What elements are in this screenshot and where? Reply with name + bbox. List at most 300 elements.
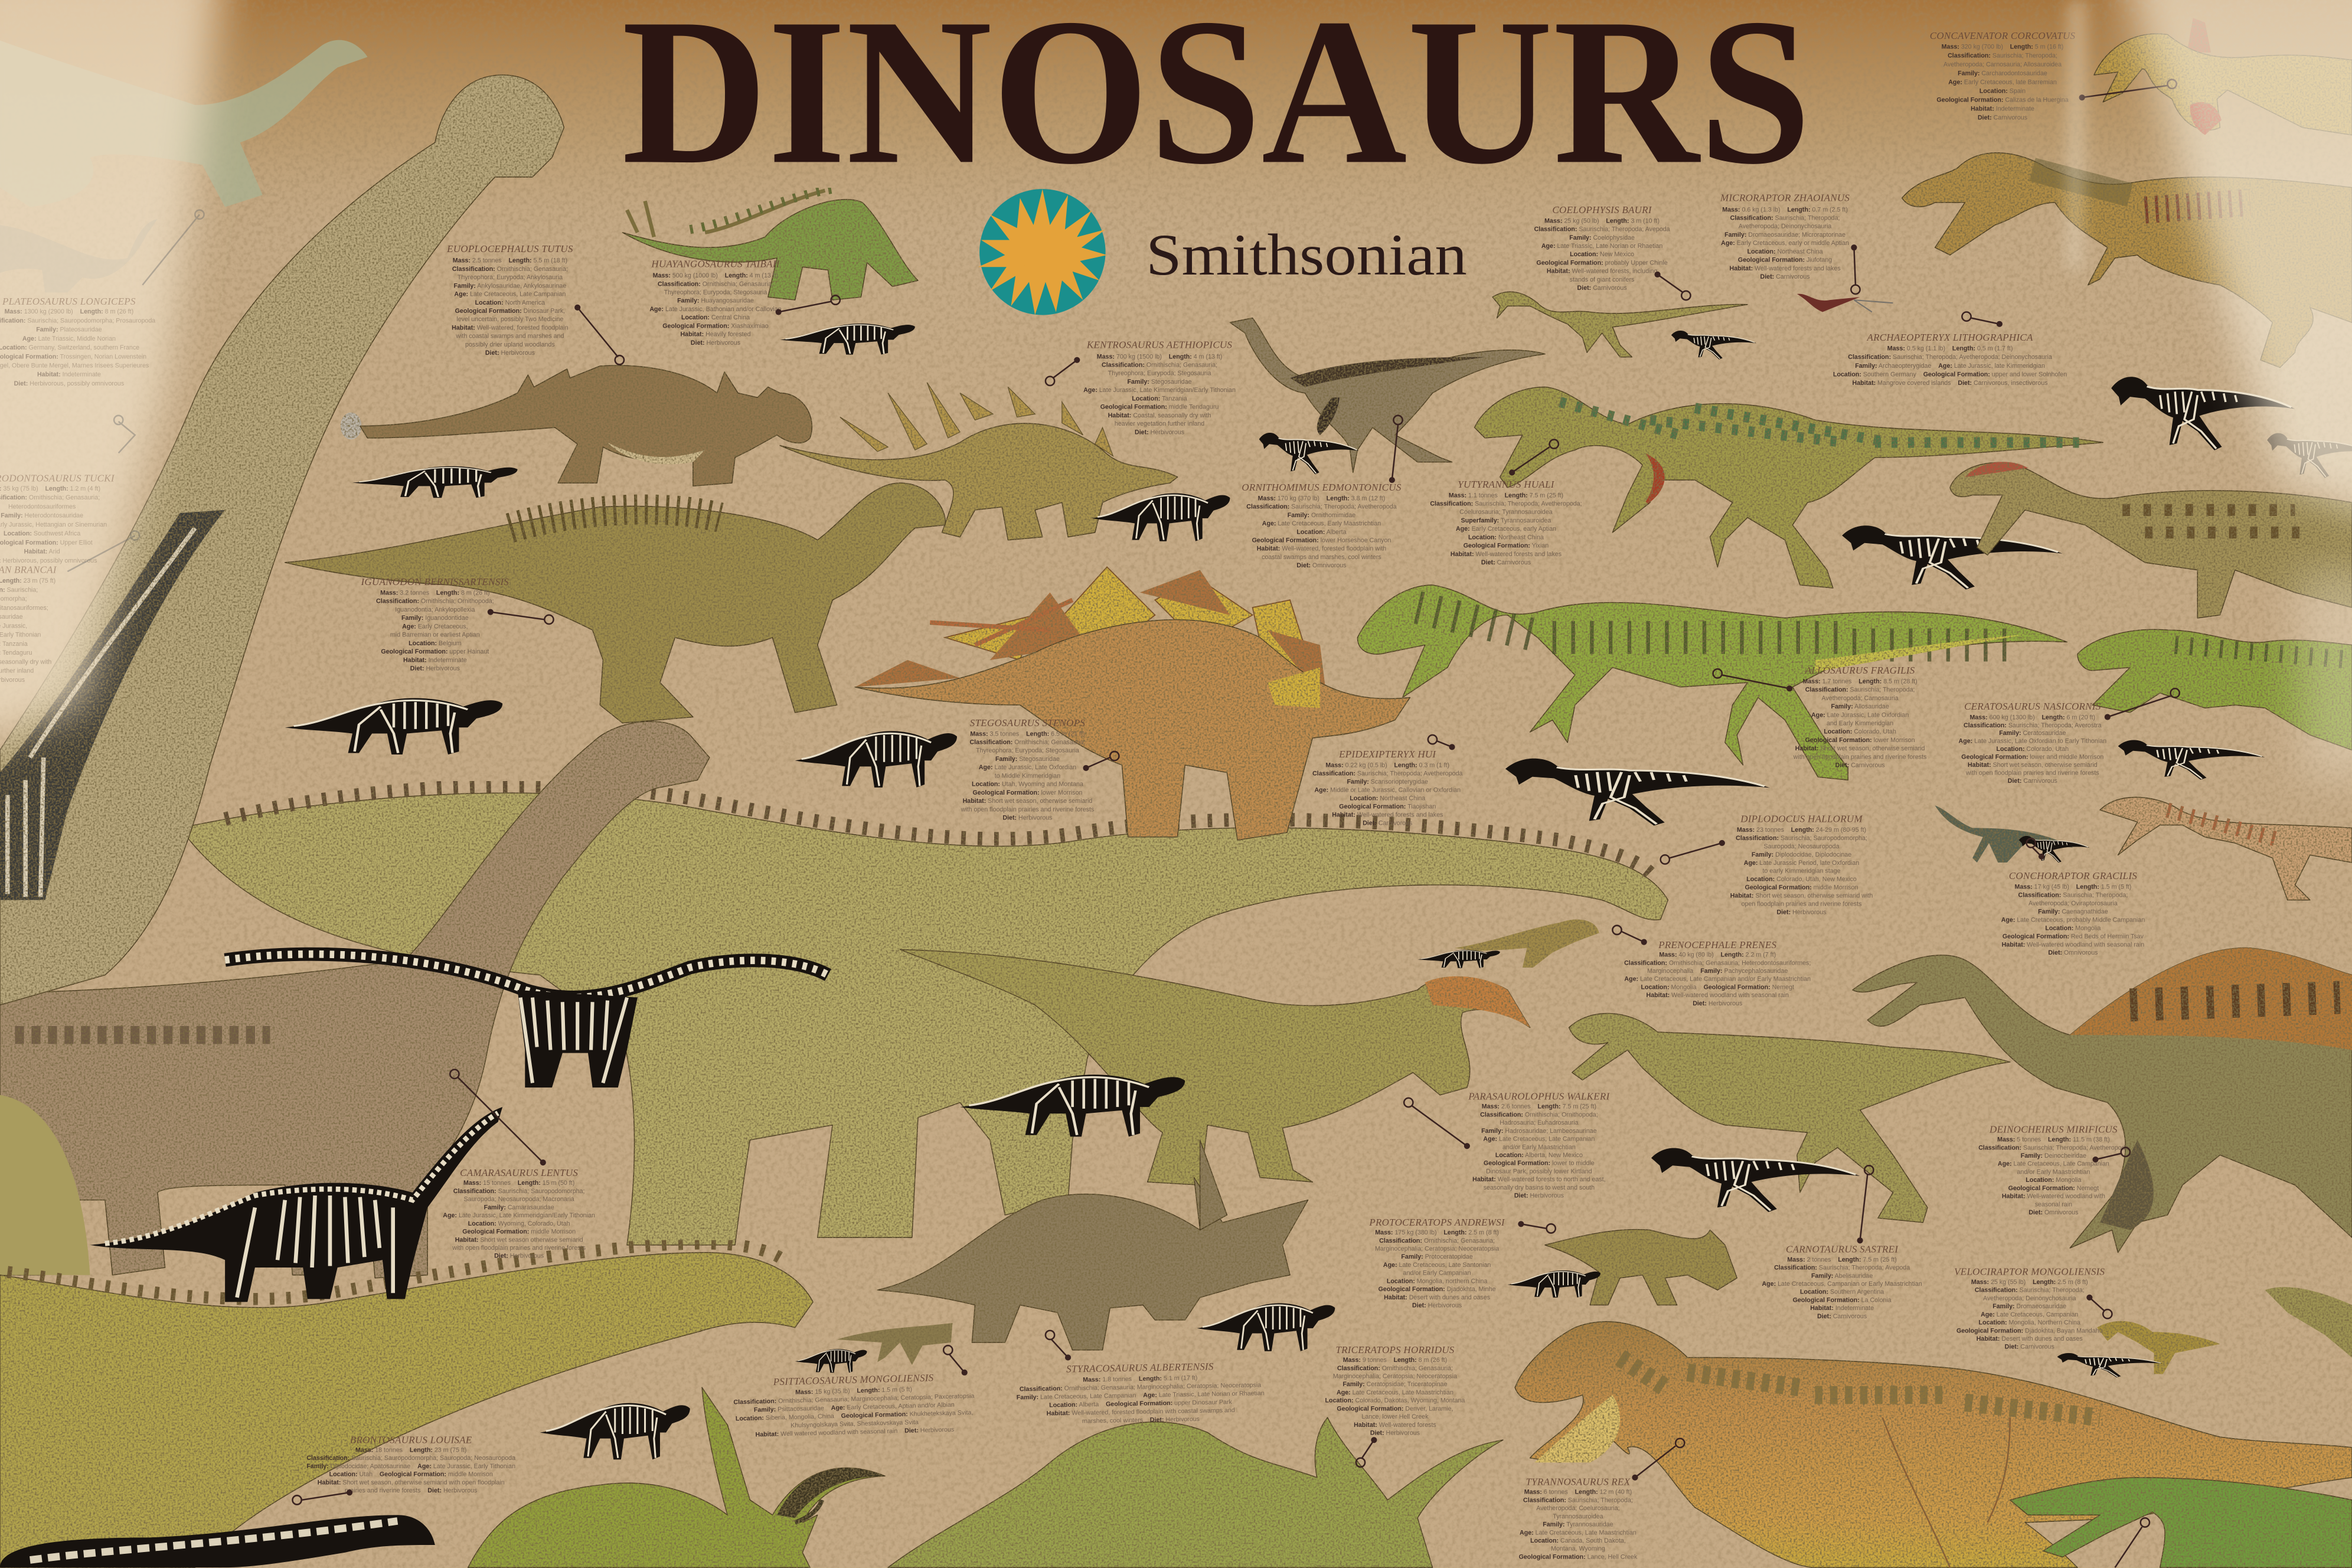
info: kentrosaurus: KENTROSAURUS AETHIOPICUS <box>1086 339 1232 350</box>
info: archaeopteryx: Habitat: Mangrove covered islands Diet: Carnivorous, insectivorous <box>1853 380 2048 387</box>
info: deinocheirus: Family: Deinocheiridae <box>2021 1152 2086 1159</box>
info: iguanodon: Classification: Ornithischia; Ornithopoda; <box>376 598 494 605</box>
info: triceratops: Family: Ceratopsidae; Triceratopinae <box>1342 1381 1448 1388</box>
info: microraptor: Habitat: Well-watered forests and lakes <box>1730 265 1841 272</box>
info: tyrannosaurus: Location: Canada, South Dakota, <box>1530 1537 1626 1544</box>
info: ceratosaurus: CERATOSAURUS NASICORNIS <box>1964 701 2101 712</box>
info: psittacosaurus: Family: Psittacosauridae Age: Early Cretaceous, Aptian and/or Albian <box>754 1402 955 1414</box>
coelophysis <box>1492 292 1747 357</box>
info: allosaurus: and Early Kimmeridgian <box>1827 720 1893 727</box>
faded dinosaur top left <box>0 40 367 207</box>
info: brontosaurus: Classification: Saurischia; Sauropodomorpha; Sauropoda; Neosauropoda <box>306 1455 515 1462</box>
info: iguanodon: Diet: Herbivorous <box>410 665 460 672</box>
info: conchoraptor: Mass: 17 kg (45 lb) Length: 1.5 m (5 ft) <box>2015 883 2131 890</box>
info: triceratops: Lance, lower Hell Creek <box>1361 1413 1429 1420</box>
info: protoceratops <box>1368 1217 1505 1309</box>
info: conchoraptor: Family: Caenagnathidae <box>2038 908 2108 915</box>
info: allosaurus: Classification: Saurischia; Theropoda; <box>1805 687 1915 694</box>
faded info: plateosaurus: Diet: Herbivorous, possibly omnivorous <box>14 380 124 387</box>
info: stegosaurus: Age: Late Jurassic, Late Oxfordian <box>979 764 1076 771</box>
info: iguanodon: Location: Belgium <box>409 640 462 647</box>
info: parasaurolophus: Diet: Herbivorous <box>1514 1193 1564 1200</box>
kentrosaurus <box>780 383 1178 540</box>
info: microraptor <box>1720 192 1850 280</box>
info: tyrannosaurus: Classification: Saurischia; Theropoda; <box>1523 1497 1633 1504</box>
ceratosaurus skeleton <box>2118 740 2265 780</box>
info: huayangosaurus <box>649 258 782 347</box>
tyrannosaur top right <box>1902 153 2352 368</box>
stegosaurus <box>855 567 1410 840</box>
info: conchoraptor: Age: Late Cretaceous, probably Middle Campanian <box>2001 916 2145 923</box>
info: diplodocus: Location: Colorado, Utah, New Mexico <box>1746 876 1857 883</box>
brachiosaurus <box>0 75 564 1005</box>
faded skeleton top left <box>0 219 158 292</box>
coelophysis skeleton <box>1671 331 1756 360</box>
info: tyrannosaurus: Tyrannosauroidea <box>1553 1513 1603 1520</box>
info: parasaurolophus: Location: Alberta, New Mexico <box>1495 1152 1583 1159</box>
info: psittacosaurus: Classification: Ornithischia; Genasauria; Marginocephalia; Ceratopsia; Paxceratopsia <box>733 1393 975 1406</box>
info: euoplocephalus: Mass: 2.5 tonnes Length: 5.5 m (18 ft) <box>453 257 567 264</box>
styracosaurus <box>877 1140 1308 1350</box>
info: concavenator: Classification: Saurischia; Theropoda; <box>1948 53 2057 60</box>
info: allosaurus: Habitat: Short wet season, otherwise semiarid <box>1795 745 1925 752</box>
info: carnotaurus: Diet: Carnivorous <box>1817 1313 1867 1320</box>
info: ornithomimus: ORNITHOMIMUS EDMONTONICUS <box>1242 482 1402 493</box>
info: styracosaurus: Family: Late Cretaceous, Late Campanian Age: Late Triassic, Late Norian or Rhaetian <box>1017 1390 1265 1401</box>
info: velociraptor: Mass: 25 kg (55 lb) Length: 2.5 m (8 ft) <box>1971 1279 2088 1286</box>
info: triceratops: Geological Formation: Denver, Laramie, <box>1337 1405 1453 1412</box>
info: carnotaurus <box>1762 1244 1922 1320</box>
info: ornithomimus: Age: Late Cretaceous, Early Maastrichtian <box>1262 520 1381 527</box>
info: camarasaurus: Family: Camarasauridae <box>484 1204 554 1211</box>
info: euoplocephalus: possibly drier upland woodlands <box>465 341 555 348</box>
info: kentrosaurus: Mass: 700 kg (1500 lb) Length: 4 m (13 ft) <box>1097 353 1222 360</box>
info: coelophysis: stands of giant conifers <box>1570 276 1634 283</box>
triceratops left <box>468 1387 885 1567</box>
info: epidexipteryx: Diet: Carnivorous <box>1363 819 1412 827</box>
info: huayangosaurus: Classification: Ornithischia; Genasauria; <box>658 280 773 288</box>
info: stegosaurus: Diet: Herbivorous <box>1002 815 1053 822</box>
info: styracosaurus: Classification: Ornithischia; Genasauria; Marginocephalia; Ceratopsia; Neoceratopsia <box>1020 1381 1261 1393</box>
info: concavenator: Habitat: Indeterminate <box>1971 106 2034 113</box>
info: tyrannosaurus <box>1519 1476 1638 1560</box>
info: epidexipteryx <box>1312 749 1462 827</box>
info: ornithomimus: Habitat: Well-watered, forested floodplain with <box>1257 545 1386 553</box>
info: yutyrannus: Coelurosauria; Tyrannosauroidea <box>1459 509 1553 516</box>
faded info: heterodontosaurus: Habitat: Arid <box>24 548 60 556</box>
info: concavenator: Age: Early Cretaceous, late Barremian <box>1948 79 2057 86</box>
info: archaeopteryx: Location: Southern Germany Geological Formation: upper and lower Solnhofen <box>1833 371 2067 378</box>
info: microraptor: Location: Northeast China <box>1747 248 1823 255</box>
styracosaurus skeleton <box>1197 1304 1335 1351</box>
info: diplodocus: Age: Late Jurassic Period, late Oxfordian <box>1744 860 1859 867</box>
iguanodon <box>285 483 945 723</box>
info: carnotaurus: Geological Formation: La Colonia <box>1793 1296 1892 1304</box>
info: archaeopteryx: Family: Archaeopterygidae Age: Late Jurassic, late Kimmeridgian <box>1855 362 2045 370</box>
info: concavenator: Diet: Carnivorous <box>1978 115 2027 122</box>
info: velociraptor: Age: Late Cretaceous, Campanian <box>1981 1311 2078 1318</box>
info: deinocheirus: seasonal rain <box>2035 1201 2072 1208</box>
info: archaeopteryx: ARCHAEOPTERYX LITHOGRAPHICA <box>1866 332 2033 343</box>
info: kentrosaurus: Location: Tanzania <box>1132 395 1187 402</box>
info: diplodocus: Geological Formation: middle Morrison <box>1745 884 1858 891</box>
info: concavenator: CONCAVENATOR CORCOVATUS <box>1930 30 2075 41</box>
info: coelophysis: Geological Formation: probably Upper Chinle <box>1537 259 1668 266</box>
info: triceratops: Location: Colorado, Dakotas, Wyoming, Montana <box>1325 1397 1465 1404</box>
info: epidexipteryx: Family: Scansoriopterygidae <box>1347 779 1428 786</box>
info: iguanodon: IGUANODON BERNISSARTENSIS <box>360 576 509 587</box>
info: styracosaurus: Mass: 1.8 tonnes Length: 5.1 m (17 ft) <box>1083 1374 1197 1384</box>
info: yutyrannus: Diet: Carnivorous <box>1481 559 1531 566</box>
info: diplodocus: Classification: Saurischia; Sauropodomorpha; <box>1736 835 1867 842</box>
info: euoplocephalus: Location: North America <box>475 299 545 306</box>
info: carnotaurus: Family: Abelisauridae <box>1811 1272 1873 1279</box>
faded info: giraffatitan <box>0 564 57 684</box>
info: camarasaurus <box>443 1167 595 1260</box>
info: yutyrannus: Geological Formation: Yixian <box>1464 543 1549 550</box>
info: conchoraptor: Classification: Saurischia; Theropoda; <box>2018 891 2128 899</box>
info: carnotaurus: Age: Late Cretaceous, Campanian or Early Maastrichtian <box>1762 1280 1922 1288</box>
info: stegosaurus: Mass: 3.5 tonnes Length: 6.5 m (21 ft) <box>970 730 1085 737</box>
info: tyrannosaurus: Family: Tyrannosauridae <box>1543 1521 1613 1528</box>
info: ceratosaurus: Mass: 600 kg (1300 lb) Length: 6 m (20 ft) <box>1969 714 2095 721</box>
faded callout pins left <box>67 210 204 571</box>
info: camarasaurus: with open floodplain prairies and riverine forests <box>452 1244 586 1252</box>
info: euoplocephalus: Habitat: Well-watered, forested floodplain <box>452 324 569 331</box>
info: huayangosaurus: Thyreophora; Eurypoda; Stegosauria <box>664 289 767 296</box>
protoceratops skeleton <box>1508 1270 1600 1298</box>
info: ceratosaurus: Classification: Saurischia; Theropoda; Averostra <box>1964 722 2102 729</box>
info: psittacosaurus: Mass: 15 kg (35 lb) Length: 1.5 m (5 ft) <box>795 1386 912 1396</box>
camarasaurus skeleton <box>90 1107 502 1302</box>
info: kentrosaurus: Diet: Herbivorous <box>1135 429 1184 436</box>
info: prenocephale <box>1624 939 1811 1007</box>
info: allosaurus: Age: Late Jurassic, Late Oxfordian <box>1811 711 1909 718</box>
info: psittacosaurus: Habitat: Well watered woodland with seasonal rain Diet: Herbivorous <box>755 1426 954 1438</box>
info: brontosaurus: Location: Utah Geological Formation: middle Morrison <box>329 1471 493 1478</box>
info: conchoraptor: Diet: Omnivorous <box>2048 949 2098 956</box>
info: stegosaurus: to Middle Kimmeridgian <box>995 772 1060 779</box>
info: deinocheirus: and/or Early Maastrichtian <box>2017 1168 2090 1175</box>
info: ceratosaurus: Age: Late Jurassic, Late Oxfordian to Early Tithonian <box>1959 738 2106 745</box>
info: epidexipteryx: Habitat: Well-watered forests and lakes <box>1332 811 1443 818</box>
info: brontosaurus: Family: Diplodocidae; Apatosaurinae Age: Late Jurassic, Early Tithonian <box>306 1463 515 1470</box>
info: diplodocus <box>1730 813 1873 916</box>
info: ornithomimus <box>1242 482 1402 569</box>
info: stegosaurus: Geological Formation: lower Morrison <box>972 789 1082 796</box>
info: coelophysis: Age: Late Triassic, Late Norian or Rhaetian <box>1541 243 1662 250</box>
yutyrannus <box>1475 387 2103 588</box>
info: microraptor: Geological Formation: Jiufotang <box>1738 257 1832 264</box>
info: triceratops: Age: Late Cretaceous, Late Maastrichtian <box>1337 1389 1453 1396</box>
info: euoplocephalus <box>446 243 573 357</box>
psittacosaurus skeleton <box>795 1349 867 1373</box>
info: camarasaurus: Sauropoda; Neosauropoda; Macronaria <box>464 1196 574 1203</box>
info: huayangosaurus: Habitat: Heavily forested <box>680 331 751 338</box>
info: triceratops: Habitat: Well-watered forests <box>1354 1422 1436 1429</box>
info: coelophysis: Diet: Carnivorous <box>1577 285 1627 292</box>
info: yutyrannus: Location: Northeast China <box>1468 534 1544 541</box>
info: microraptor: Age: Early Cretaceous, early or middle Aptian <box>1721 240 1849 247</box>
ornithomimus <box>1230 318 1545 472</box>
info: diplodocus: Habitat: Short wet season, otherwise semiarid with <box>1730 893 1873 900</box>
info: ornithomimus: Location: Alberta <box>1296 528 1347 535</box>
info: protoceratops: Mass: 175 kg (380 lb) Length: 2.5 m (8 ft) <box>1375 1229 1499 1236</box>
info: huayangosaurus: Mass: 500 kg (1000 lb) Length: 4 m (13 ft) <box>653 272 778 279</box>
concavenator <box>2094 18 2352 135</box>
info: velociraptor: Geological Formation: Djadokhta, Bayan Mandahu <box>1956 1327 2103 1334</box>
info: microraptor: Family: Dromaeosauridae; Microraptorinae <box>1724 231 1845 239</box>
info: protoceratops: Diet: Herbivorous <box>1412 1302 1462 1309</box>
stegosaurus skeleton <box>795 731 957 788</box>
info: carnotaurus: CARNOTAURUS SASTREI <box>1786 1244 1899 1255</box>
info: tyrannosaurus: Geological Formation: Lance, Hell Creek <box>1519 1553 1638 1560</box>
faded info: plateosaurus: Age: Late Triassic, Middle Norian <box>22 335 116 342</box>
info: camarasaurus: CAMARASAURUS LENTUS <box>460 1167 578 1178</box>
info: kentrosaurus: Age: Late Jurassic, Late Kimmeridgian/Early Tithonian <box>1083 387 1236 394</box>
info: coelophysis: Classification: Saurischia; Theropoda; Avepoda <box>1534 226 1670 233</box>
info: huayangosaurus: Geological Formation: Xiashaximiao <box>662 322 769 329</box>
info: allosaurus: Family: Allosauridae <box>1831 703 1889 710</box>
info: ornithomimus: coastal swamps and marshes, cool winters <box>1262 554 1381 561</box>
iguanodon skeleton <box>285 698 502 754</box>
yutyrannus skeleton <box>1842 525 2063 590</box>
info: diplodocus: Sauropoda; Neosauropoda <box>1764 843 1840 850</box>
carnotaurus <box>1569 1014 2010 1223</box>
info: microraptor: MICRORAPTOR ZHAOIANUS <box>1720 192 1850 203</box>
info: concavenator: Family: Carcharodontosauridae <box>1958 70 2047 77</box>
info: huayangosaurus: Diet: Herbivorous <box>691 339 740 347</box>
info: concavenator: Location: Spain <box>1979 88 2026 95</box>
conchoraptor skeleton <box>2019 836 2089 863</box>
info: triceratops <box>1325 1344 1465 1437</box>
info: diplodocus: DIPLODOCUS HALLORUM <box>1740 813 1863 824</box>
info: psittacosaurus: Location: Siberia, Mongolia, China Geological Formation: Khukhetekskaya Svita, <box>736 1409 974 1422</box>
info: concavenator: Geological Formation: Calizas de la Huergina <box>1936 97 2069 104</box>
info: protoceratops: Classification: Ornithischia; Genasauria; <box>1379 1237 1495 1244</box>
info: conchoraptor: Habitat: Well-watered woodland with seasonal rain <box>2002 941 2144 948</box>
info: microraptor: Diet: Carnivorous <box>1760 273 1810 280</box>
allosaurus skeleton <box>1505 759 1770 825</box>
info: triceratops: Diet: Herbivorous <box>1370 1430 1420 1437</box>
info: camarasaurus: Diet: Herbivorous <box>494 1253 544 1260</box>
info: euoplocephalus: Family: Ankylosauridae, Ankylosaurinae <box>454 282 566 289</box>
info: yutyrannus: Age: Early Cretaceous, early Aptian <box>1456 525 1556 533</box>
info: allosaurus: Mass: 1.7 tonnes Length: 8.5 m (28 ft) <box>1802 678 1917 685</box>
info: epidexipteryx: Location: Northeast China <box>1350 795 1425 802</box>
info: allosaurus: Diet: Carnivorous <box>1835 762 1885 769</box>
info: diplodocus: Family: Diplodocidae, Diplodocinae <box>1752 851 1851 858</box>
info: psittacosaurus: PSITTACOSAURUS MONGOLIENSIS <box>773 1372 934 1387</box>
info: kentrosaurus <box>1083 339 1236 436</box>
info: yutyrannus: Mass: 1.1 tonnes Length: 7.5 m (25 ft) <box>1449 492 1563 499</box>
faded info: heterodontosaurus <box>0 473 115 564</box>
info: epidexipteryx: EPIDEXIPTERYX HUI <box>1338 749 1436 760</box>
info: stegosaurus: Family: Stegosauridae <box>995 756 1060 763</box>
info: iguanodon: Age: Early Cretaceous, <box>402 623 468 630</box>
ceratosaurus <box>2077 629 2352 750</box>
info: parasaurolophus: Habitat: Well-watered forests to north and east, <box>1472 1176 1606 1183</box>
faded info: plateosaurus: PLATEOSAURUS LONGICEPS <box>2 296 136 307</box>
info: conchoraptor: Location: Mongolia <box>2045 925 2101 932</box>
info: stegosaurus: Habitat: Short wet season, otherwise semiarid <box>963 798 1092 805</box>
info: euoplocephalus: level uncertain, possibly Two Medicine <box>456 316 563 323</box>
allosaurus <box>1357 585 2067 780</box>
info: tyrannosaurus: TYRANNOSAURUS REX <box>1526 1476 1631 1487</box>
info: velociraptor: Location: Mongolia, Northern China <box>1979 1319 2080 1327</box>
info: diplodocus: Mass: 23 tonnes Length: 24-29 m (80-95 ft) <box>1737 827 1866 834</box>
brachiosaurus leg <box>0 1095 90 1275</box>
info: ornithomimus: Diet: Omnivorous <box>1296 562 1347 569</box>
info: huayangosaurus: Family: Huayangosauridae <box>677 298 754 305</box>
smithsonian wordmark: Smithsonian <box>1146 223 1467 288</box>
info: tyrannosaurus: Mass: 6 tonnes Length: 12 m (40 ft) <box>1524 1489 1632 1496</box>
info: prenocephale: Location: Mongolia Geological Formation: Nemegt <box>1641 984 1794 991</box>
info: ceratosaurus: Diet: Carnivorous <box>2008 778 2057 785</box>
info: deinocheirus: Diet: Omnivorous <box>2028 1209 2078 1216</box>
info: camarasaurus: Classification: Saurischia; Sauropodomorpha; <box>453 1188 584 1195</box>
info: stegosaurus <box>961 717 1094 822</box>
info: parasaurolophus: Family: Hadrosauridae; Lambeosaurinae <box>1481 1128 1597 1135</box>
info: deinocheirus <box>1978 1123 2129 1216</box>
info: allosaurus: Geological Formation: lower Morrison <box>1805 737 1915 744</box>
info: yutyrannus: Habitat: Well-watered forests and lakes <box>1451 551 1562 558</box>
info: diplodocus: to early Kimmeridgian stage <box>1762 868 1841 875</box>
ornithomimus skeleton <box>1259 433 1359 474</box>
info: concavenator <box>1930 30 2075 122</box>
info: kentrosaurus: Family: Stegosauridae <box>1128 378 1192 386</box>
info: triceratops: Mass: 9 tonnes Length: 8 m (26 ft) <box>1343 1357 1447 1364</box>
green theropod bottom right <box>2010 1478 2352 1567</box>
info: iguanodon: Habitat: Indeterminate <box>403 656 467 664</box>
info: styracosaurus: Habitat: Well-watered, forested floodplain with coastal swamps and <box>1047 1407 1235 1417</box>
info: triceratops: TRICERATOPS HORRIDUS <box>1335 1344 1455 1355</box>
info: deinocheirus: Habitat: Well-watered woodland with <box>2002 1193 2105 1200</box>
info: kentrosaurus: Habitat: Coastal, seasonally dry with <box>1108 412 1211 419</box>
microraptor <box>1797 294 1893 312</box>
faded info: plateosaurus: Mass: 1300 kg (2900 lb) Length: 8 m (26 ft) <box>5 308 133 315</box>
info: microraptor: Avetheropoda; Deinonychosauria <box>1739 223 1831 230</box>
euoplocephalus <box>341 365 812 486</box>
info: iguanodon: Family: Iguanodontidae <box>401 615 469 622</box>
faded info: heterodontosaurus: Location: Southwest Africa <box>4 530 80 537</box>
theropod right edge <box>2265 1287 2352 1357</box>
info: brontosaurus: Mass: 18 tonnes Length: 23 m (75 ft) <box>355 1447 466 1454</box>
info: conchoraptor <box>2001 870 2145 956</box>
smithsonian sun logo <box>978 189 1107 315</box>
parasaurolophus <box>900 949 1530 1185</box>
info: epidexipteryx: Age: Middle or Late Jurassic, Callovian or Oxfordian <box>1314 787 1461 794</box>
faded info: plateosaurus: Location: Germany, Switzerland, southern France <box>0 344 139 351</box>
info: ceratosaurus: Family: Ceratosauridae <box>1999 730 2066 737</box>
info: yutyrannus: YUTYRANNUS HUALI <box>1458 479 1555 490</box>
info: epidexipteryx: Classification: Saurischia; Theropoda; Avetheropoda <box>1312 770 1462 778</box>
info: parasaurolophus: Hadrosauria; Euhadrosauria <box>1500 1119 1579 1126</box>
info: stegosaurus: Thyreophora; Eurypoda; Stegosauria <box>976 747 1079 754</box>
info: archaeopteryx: Classification: Saurischia; Theropoda; Avetheropoda; Deinonychosauria <box>1848 354 2052 361</box>
info: yutyrannus: Classification: Saurischia; Theropoda; Avetheropoda; <box>1430 501 1582 508</box>
info: parasaurolophus: Mass: 2.6 tonnes Length: 7.5 m (25 ft) <box>1482 1103 1596 1110</box>
info: iguanodon <box>360 576 509 672</box>
info: protoceratops: Geological Formation: Djadokhta, Minhe <box>1378 1286 1496 1293</box>
info: velociraptor <box>1954 1266 2105 1351</box>
info: styracosaurus: Location: Alberta Geological Formation: upper Dinosaur Park <box>1049 1399 1233 1409</box>
info: ornithomimus: Family: Ornithomimidae <box>1288 512 1355 519</box>
info: iguanodon: mid Barremian or earliest Aptian <box>390 632 480 639</box>
info: allosaurus: with open floodplain prairies and riverine forests <box>1793 753 1926 760</box>
info: euoplocephalus: Classification: Ornithischia; Genasauria; <box>452 266 568 273</box>
info: huayangosaurus: Location: Central China <box>681 314 750 321</box>
info: conchoraptor: CONCHORAPTOR GRACILIS <box>2009 870 2137 881</box>
info: brontosaurus: BRONTOSAURUS LOUISAE <box>350 1434 472 1445</box>
info: tyrannosaurus: Avetheropoda; Coelurosauria; <box>1536 1505 1620 1512</box>
brontosaurus <box>0 1243 813 1567</box>
faded info: plateosaurus: Family: Plateosauridae <box>36 326 102 334</box>
info: stegosaurus: Classification: Ornithischia; Genasauria; <box>969 739 1085 746</box>
info: ornithomimus: Classification: Saurischia; Theropoda; Avetheropoda <box>1246 504 1397 511</box>
info: ornithomimus: Geological Formation: lower Horseshoe Canyon <box>1252 537 1391 544</box>
info: brontosaurus: Habitat: Short wet season, otherwise semiarid with open floodplain <box>318 1479 505 1486</box>
info: coelophysis: Mass: 25 kg (50 lb) Length: 3 m (10 ft) <box>1544 217 1660 224</box>
info: styracosaurus <box>1016 1360 1265 1426</box>
info: parasaurolophus: Classification: Ornithischia; Ornithopoda; <box>1480 1111 1598 1118</box>
info: camarasaurus: Habitat: Short wet season otherwise semiarid <box>455 1236 583 1243</box>
info: archaeopteryx: Mass: 0.5 kg (1.1 lb) Length: 0.5 m (1.7 ft) <box>1887 345 2013 352</box>
info: epidexipteryx: Mass: 0.22 kg (0.5 lb) Length: 0.3 m (1 ft) <box>1325 762 1449 769</box>
parasaurolophus skeleton <box>960 1074 1185 1136</box>
velociraptor skeleton <box>2057 1353 2163 1377</box>
info: triceratops: Marginocephalia; Ceratopsia; Neoceratopsia <box>1333 1373 1457 1380</box>
info: brontosaurus: prairies and riverine forests Diet: Herbivorous <box>345 1487 477 1494</box>
info: allosaurus: Avetheropoda; Carnosauria <box>1822 695 1899 702</box>
info: camarasaurus: Age: Late Jurassic, Late Kimmeridgian/Early Tithonian <box>443 1212 595 1219</box>
deinocheirus <box>1853 948 2352 1253</box>
info: tyrannosaurus: Montana, Wyoming <box>1551 1546 1605 1553</box>
info: euoplocephalus: Diet: Herbivorous <box>485 349 535 357</box>
info: protoceratops: PROTOCERATOPS ANDREWSI <box>1368 1217 1505 1228</box>
info: parasaurolophus: PARASAUROLOPHUS WALKERI <box>1468 1090 1611 1102</box>
triceratops centre <box>888 1417 1503 1567</box>
info: kentrosaurus: Classification: Ornithischia; Genasauria; <box>1102 361 1217 368</box>
info: iguanodon: Mass: 3.2 tonnes Length: 8 m (26 ft) <box>380 589 490 596</box>
info: triceratops: Classification: Ornithischia; Genasauria; <box>1337 1365 1453 1372</box>
psittacosaurus <box>837 1323 952 1365</box>
info: stegosaurus: with open floodplain prairies and riverine forests <box>961 806 1094 813</box>
brontosaurus skeleton <box>0 1515 435 1567</box>
info: ceratosaurus: Habitat: Short wet season, otherwise semiarid <box>1968 762 2098 769</box>
info: carnotaurus: Location: Southern Argentina <box>1800 1289 1884 1296</box>
small pin and triceratops skeleton <box>540 1403 690 1459</box>
info: styracosaurus: STYRACOSAURUS ALBERTENSIS <box>1066 1361 1214 1374</box>
info: ornithomimus: Mass: 170 kg (370 lb) Length: 3.8 m (12 ft) <box>1258 495 1385 502</box>
info: concavenator: Mass: 320 kg (700 lb) Length: 5 m (16 ft) <box>1942 44 2063 51</box>
info: stegosaurus: Location: Utah, Wyoming and Montana <box>972 781 1083 788</box>
info: camarasaurus: Location: Wyoming, Colorado, Utah <box>468 1220 570 1227</box>
info: coelophysis: Location: New Mexico <box>1570 251 1634 258</box>
info: iguanodon: Iguanodontia; Ankylopollexia <box>395 606 475 613</box>
info: microraptor: Classification: Saurischia; Theropoda; <box>1730 214 1840 221</box>
info: carnotaurus: Habitat: Indeterminate <box>1810 1305 1874 1312</box>
info: carnotaurus: Classification: Saurischia; Theropoda; Avepoda <box>1774 1265 1910 1272</box>
info: velociraptor: VELOCIRAPTOR MONGOLIENSIS <box>1954 1266 2105 1278</box>
faded info: heterodontosaurus: Heterodontosauriformes <box>8 503 76 510</box>
info: huayangosaurus: Age: Late Jurassic, Bathonian and/or Callovian <box>649 306 782 313</box>
diplodocus <box>180 786 1668 1245</box>
carnotaurus skeleton <box>1651 1148 1860 1212</box>
camarasaurus <box>0 721 710 1278</box>
info: stegosaurus: STEGOSAURUS STENOPS <box>970 717 1085 729</box>
info: coelophysis: Habitat: Well-watered forests, including <box>1547 268 1657 275</box>
